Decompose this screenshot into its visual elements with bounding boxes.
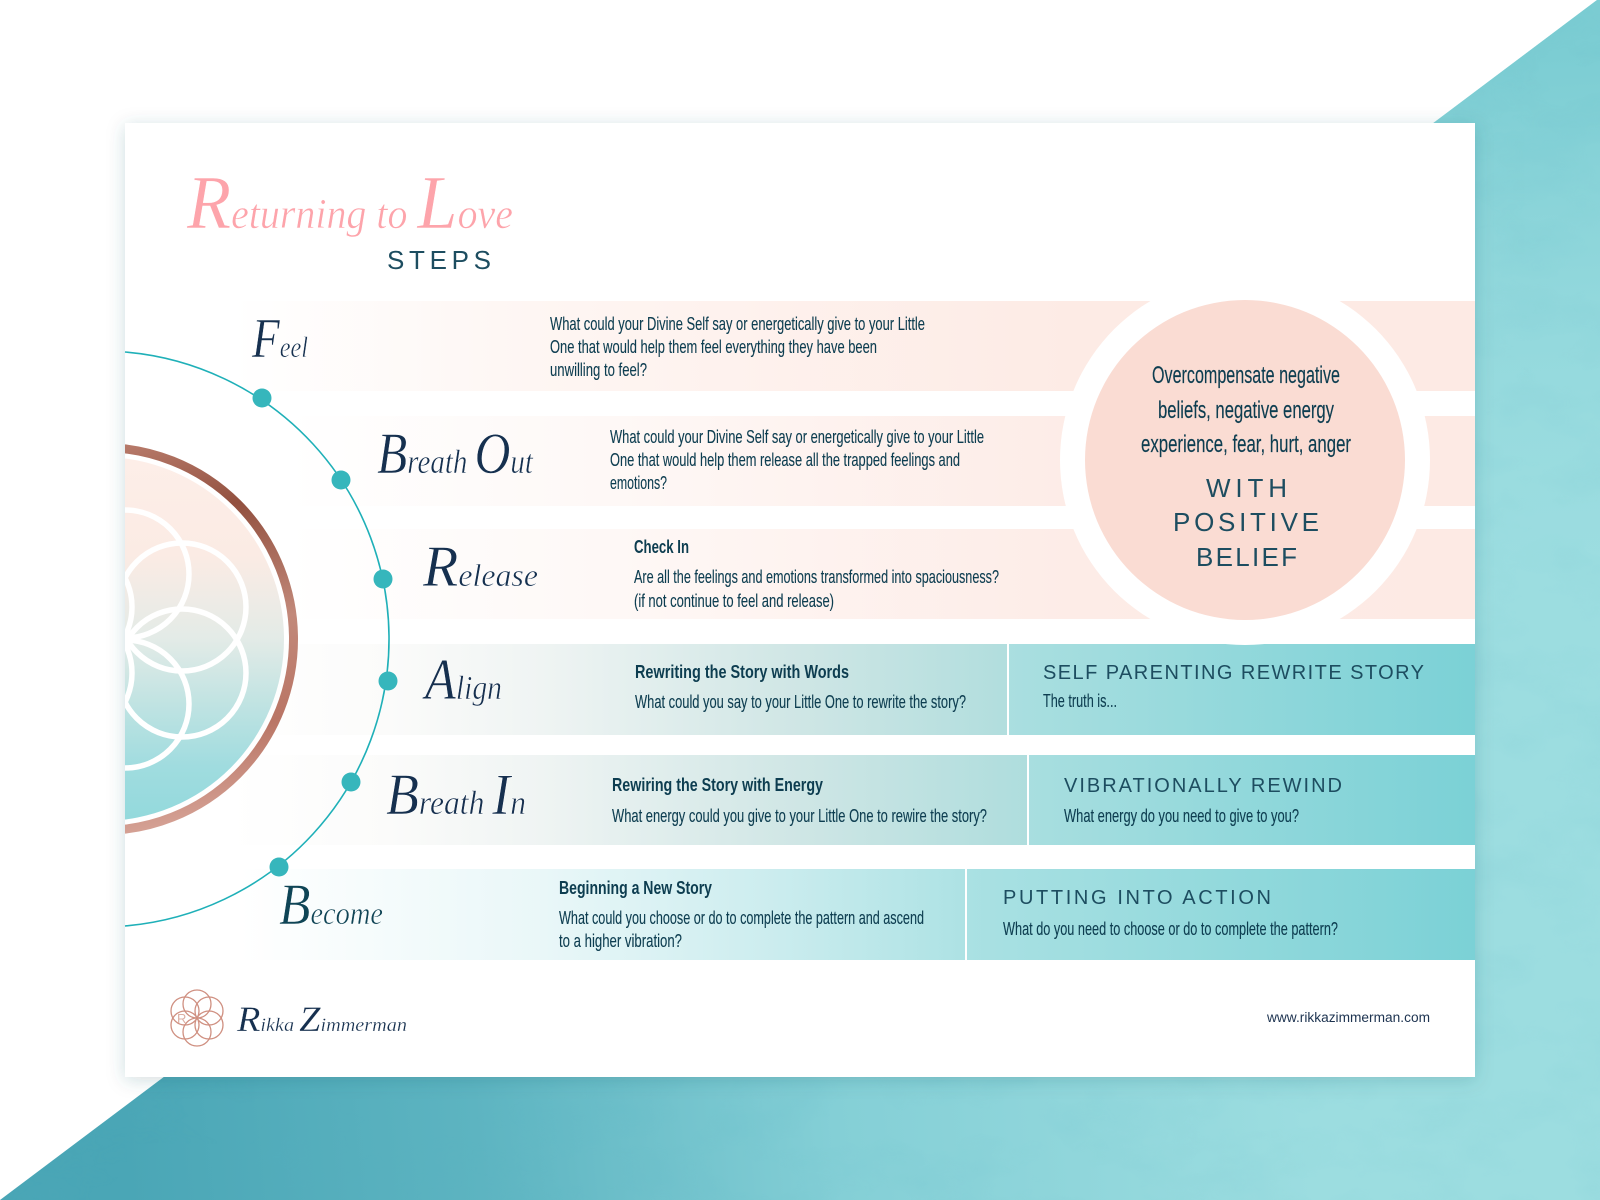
circle body text: experience, fear, hurt, anger: [1141, 431, 1351, 458]
logo flower icon: [171, 990, 223, 1046]
become body text: to a higher vibration?: [559, 930, 682, 951]
become body text: Beginning a New Story: [559, 877, 713, 898]
become right panel text: PUTTING INTO ACTION: [1003, 887, 1271, 909]
rose gold flower disc: [125, 444, 298, 834]
breath out body text: emotions?: [610, 472, 667, 493]
label: Feel: Feel: [251, 308, 308, 370]
align body text: What could you say to your Little One to rewrite the story?: [635, 691, 966, 712]
breath in body text: Rewiring the Story with Energy: [612, 774, 824, 795]
label: Align: Align: [422, 647, 502, 712]
step bands: [125, 301, 1475, 960]
band: become: [125, 869, 1475, 960]
rose ring: [125, 444, 298, 834]
band: feel: [125, 301, 1475, 391]
timeline arc: [125, 352, 398, 926]
with positive belief: BELIEF: [1196, 542, 1297, 572]
breath out body text: What could your Divine Self say or energetically give to your Little: [610, 426, 984, 447]
label: Become: Become: [279, 872, 383, 937]
footer logo: [171, 990, 407, 1046]
feel body text: unwilling to feel?: [550, 359, 647, 380]
circle body text: [1141, 362, 1351, 458]
align right panel text: The truth is...: [1043, 690, 1117, 711]
title script: Returning to Love: [186, 161, 513, 245]
breath in body text: [612, 774, 987, 826]
label: Release: Release: [422, 534, 538, 599]
band: release: [125, 529, 1475, 619]
align body text: Rewriting the Story with Words: [635, 661, 849, 682]
white ring: [1060, 275, 1430, 645]
logo monogram: R: [177, 1011, 186, 1026]
with positive belief: WITH: [1206, 473, 1287, 503]
become right panel text: [1003, 887, 1338, 939]
align body text: [635, 661, 966, 712]
band: breath in: [125, 755, 1475, 845]
breath in right panel text: What energy do you need to give to you?: [1064, 805, 1299, 826]
align right panel text: SELF PARENTING REWRITE STORY: [1043, 662, 1424, 684]
breath out body text: One that would help them release all the trapped feelings and: [610, 449, 960, 470]
feel body text: One that would help them feel everything they have been: [550, 336, 877, 357]
with positive belief: [1173, 473, 1319, 572]
timeline dots: [252, 388, 398, 876]
peach belief circle: [1060, 275, 1430, 645]
breath out body text: [610, 426, 984, 493]
become right panel text: What do you need to choose or do to complete the pattern?: [1003, 918, 1338, 939]
become body text: [559, 877, 924, 951]
logo name: Rikka Zimmerman: [236, 999, 407, 1039]
white card panel: [125, 123, 1475, 1077]
title subheading: STEPS: [387, 245, 491, 275]
release body text: (if not continue to feel and release): [634, 590, 834, 611]
band: breath out: [125, 416, 1475, 506]
circle body text: Overcompensate negative: [1152, 362, 1340, 389]
feel body text: [550, 313, 925, 380]
release body text: [634, 536, 999, 611]
arc line: [125, 352, 389, 926]
label: Breath In: Breath In: [386, 762, 526, 827]
band: align: [125, 644, 1475, 735]
dividers between band panels: [965, 644, 1029, 960]
with positive belief: POSITIVE: [1173, 507, 1319, 537]
breath in body text: What energy could you give to your Little One to rewire the story?: [612, 805, 987, 826]
align right panel text: [1043, 662, 1424, 711]
feel body text: What could your Divine Self say or energetically give to your Little: [550, 313, 925, 334]
title: [186, 161, 513, 275]
release body text: Are all the feelings and emotions transformed into spaciousness?: [634, 566, 999, 587]
release body text: Check In: [634, 536, 689, 557]
footer website: www.rikkazimmerman.com: [1266, 1010, 1430, 1025]
circle body text: beliefs, negative energy: [1158, 397, 1334, 424]
become body text: What could you choose or do to complete the pattern and ascend: [559, 907, 924, 928]
label: Breath Out: Breath Out: [377, 421, 534, 486]
breath in right panel text: [1064, 775, 1342, 826]
flower of life petals: [125, 507, 249, 771]
step script labels: [251, 308, 538, 937]
breath in right panel text: VIBRATIONALLY REWIND: [1064, 775, 1342, 797]
gradient disc: [125, 458, 284, 820]
peach circle: [1085, 300, 1405, 620]
